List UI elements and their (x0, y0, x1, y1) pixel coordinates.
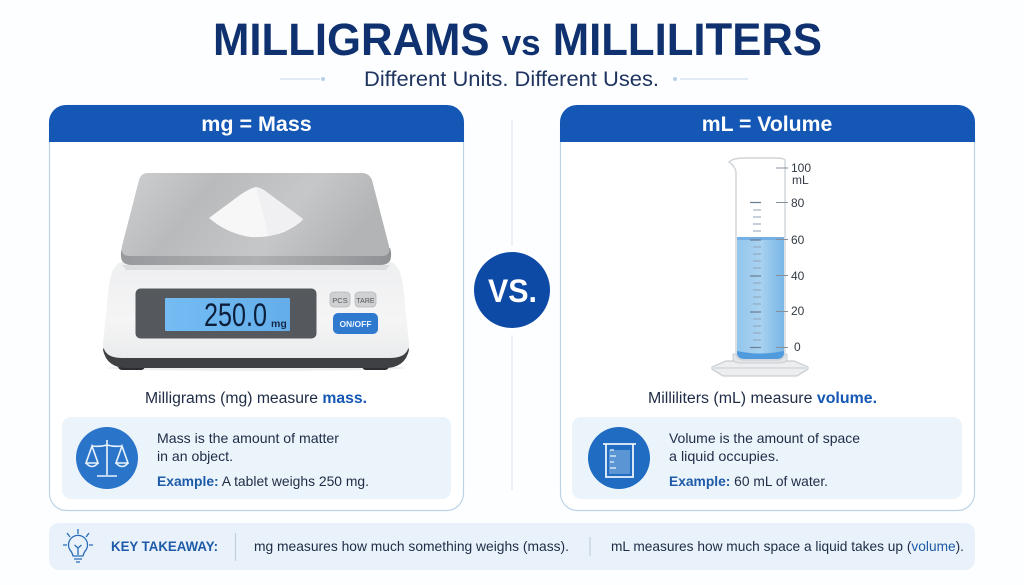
panel: volume (560, 105, 975, 510)
lcd display: mg (271, 318, 287, 330)
cylinder scale labels: 40 (791, 269, 805, 283)
cylinder scale labels: 0 (794, 340, 801, 354)
scale buttons: ON/OFF (339, 319, 372, 329)
cylinder scale labels: 80 (791, 196, 805, 210)
panel header: volume (560, 105, 975, 142)
info text: mass: Mass is the amount of matter (157, 430, 339, 446)
info text: volume: Example: 60 mL of water. (669, 473, 828, 489)
vs badge: VS. (488, 273, 537, 309)
panel header: mass (49, 105, 464, 142)
vs badge (474, 252, 550, 328)
cylinder scale labels (791, 161, 811, 354)
scale buttons (330, 292, 378, 334)
info text: mass (157, 430, 369, 489)
subtitle (280, 68, 748, 91)
icon: light bulb (63, 529, 93, 562)
graduated cylinder illustration (712, 158, 811, 376)
key takeaway bar (49, 523, 975, 570)
panel frame: volume (560, 106, 974, 510)
panel header: volume: mL = Volume (702, 113, 832, 136)
panel frame: mass (50, 106, 464, 510)
center divider (511, 120, 513, 490)
cylinder scale labels: 20 (791, 304, 805, 318)
cylinder scale labels: 100 (791, 161, 811, 175)
info text: volume (669, 430, 860, 489)
scale buttons: PCS (332, 296, 348, 305)
info box: mass (62, 417, 451, 499)
powder pile (209, 187, 303, 237)
panel header: mass: mg = Mass (201, 112, 312, 136)
info text: volume: a liquid occupies. (669, 448, 779, 464)
info text: mass: Example: A tablet weighs 250 mg. (157, 473, 369, 489)
info text: mass: in an object. (157, 448, 233, 464)
takeaway text: mL: mL measures how much space a liquid takes up (volume). (611, 538, 964, 554)
cylinder scale labels: mL (792, 173, 809, 187)
digital scale illustration (103, 173, 409, 371)
info box: volume (572, 417, 962, 499)
panel: mass (49, 105, 464, 510)
cylinder scale labels: 60 (791, 233, 805, 247)
scale buttons: TARE (356, 298, 375, 305)
lcd display (136, 288, 316, 338)
info text: volume: Volume is the amount of space (669, 430, 860, 446)
lcd display: 250.0 (204, 297, 267, 333)
icon: balance scale (76, 427, 138, 489)
cylinder tick marks (750, 168, 788, 348)
title: MILLIGRAMS vs MILLILITERS (213, 14, 822, 65)
icon: beaker (588, 427, 650, 489)
mass caption: Milligrams (mg) measure mass. (145, 390, 367, 407)
takeaway label: KEY TAKEAWAY: (111, 538, 218, 554)
subtitle: Different Units. Different Uses. (364, 68, 659, 91)
volume caption: Milliliters (mL) measure volume. (648, 390, 877, 407)
takeaway text: mg: mg measures how much something weighs (mass). (254, 538, 569, 554)
